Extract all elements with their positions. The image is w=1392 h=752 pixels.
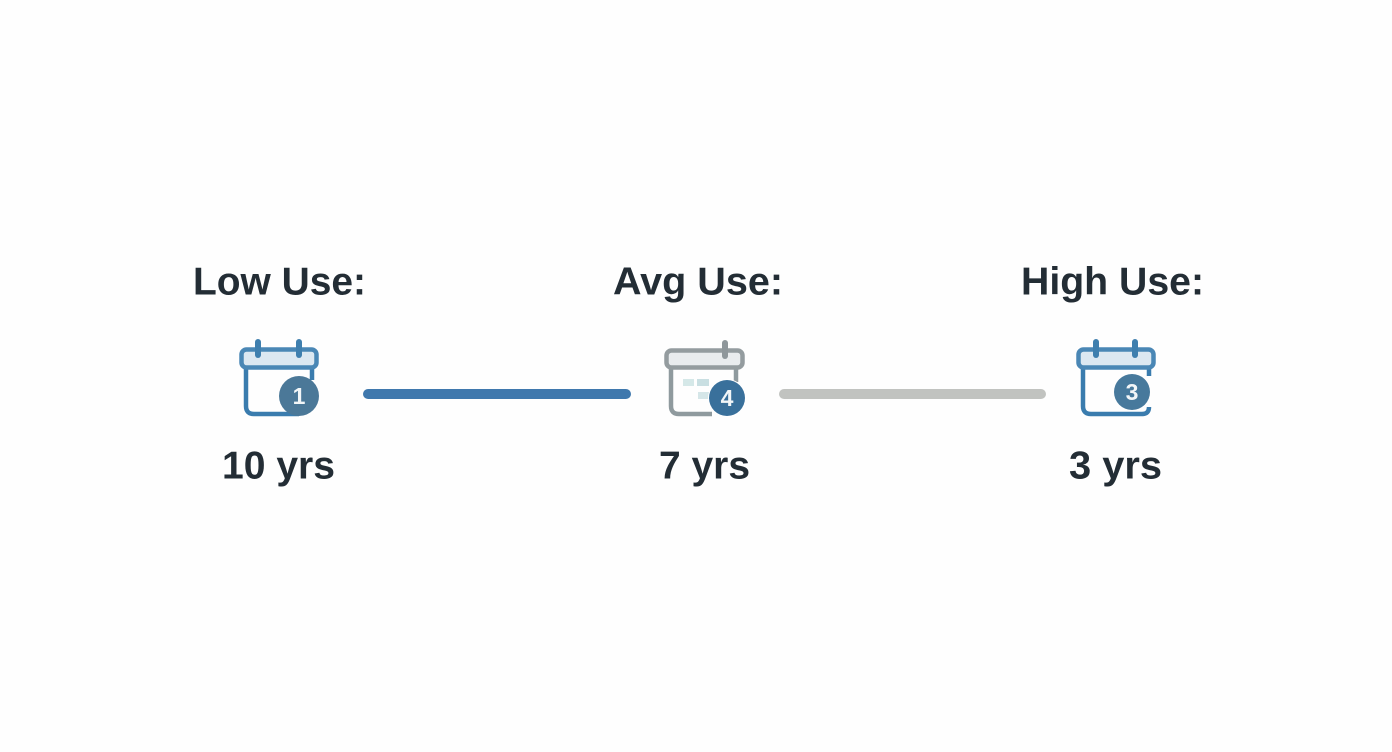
value: 10 years: 10 yrs (222, 444, 335, 488)
icon: calendar 1: 1 (293, 383, 306, 409)
value: 3 years: 3 yrs (1069, 444, 1162, 488)
icon: calendar 3 (1078, 342, 1154, 414)
value: 7 years: 7 yrs (659, 444, 750, 488)
icon: calendar 1 (242, 342, 319, 416)
icon: calendar 4: 4 (721, 385, 734, 411)
heading: average use: Avg Use: (613, 260, 783, 304)
bar: gray connector (779, 389, 1046, 399)
icon: calendar 3: 3 (1126, 379, 1138, 405)
bar: blue connector (363, 389, 631, 399)
heading: low use: Low Use: (193, 260, 366, 304)
heading: high use: High Use: (1021, 260, 1204, 304)
icon: calendar 4 (666, 343, 746, 417)
